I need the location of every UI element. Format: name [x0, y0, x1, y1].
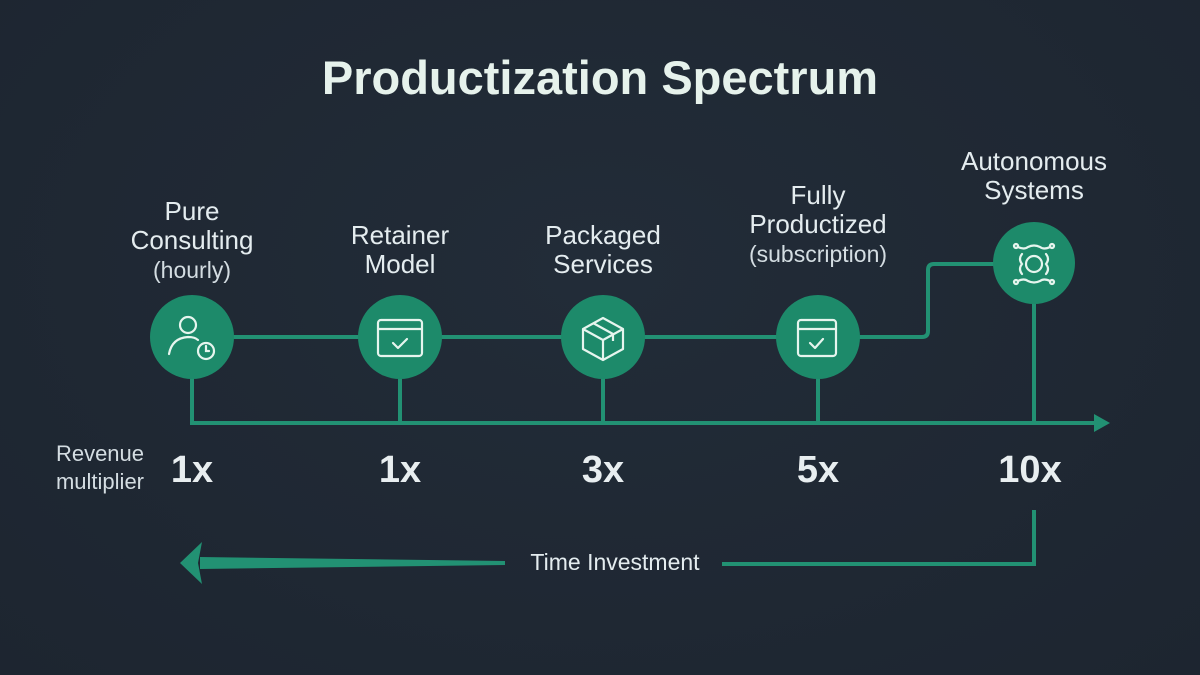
icon: browser check: [378, 320, 422, 356]
label: fully productized: [749, 180, 887, 267]
text: 1x: [171, 449, 213, 491]
label: retainer: [351, 220, 449, 279]
icon: box: [583, 318, 623, 360]
icon: person with clock: [169, 317, 214, 359]
label: autonomous: Systems: [984, 175, 1084, 205]
arrow: axis head: [1094, 414, 1110, 432]
text: 3x: [582, 449, 624, 491]
label: pure consulting: Pure: [165, 196, 219, 226]
label: time investment: Time Investment: [530, 549, 700, 575]
icon: browser check 2: [798, 320, 836, 356]
label: revenue multiplier: [56, 441, 144, 494]
label: fully productized: Fully: [791, 180, 845, 210]
text: 10x: [998, 449, 1062, 491]
label: packaged: [545, 220, 661, 279]
label: revenue multiplier: Revenue: [56, 441, 144, 466]
label: pure consulting: Consulting: [131, 225, 253, 255]
label: packaged: Packaged: [545, 220, 661, 250]
circles: [150, 222, 1075, 379]
text: 5x: [797, 449, 839, 491]
label: autonomous: Autonomous: [961, 146, 1107, 176]
label: fully productized: (subscription): [749, 241, 887, 267]
numbers: [171, 449, 1062, 491]
icon: gear circuit: [1014, 244, 1054, 284]
label: autonomous: [961, 146, 1107, 205]
label: revenue multiplier: multiplier: [56, 469, 144, 494]
label: retainer: Retainer: [351, 220, 449, 250]
arrow: time investment: [180, 542, 505, 584]
label: pure consulting: [131, 196, 253, 283]
label: fully productized: Productized: [749, 209, 887, 239]
text: 1x: [379, 449, 421, 491]
title: Productization Spectrum: [322, 51, 878, 104]
label: packaged: Services: [553, 249, 653, 279]
label: retainer: Model: [365, 249, 435, 279]
label: pure consulting: (hourly): [153, 257, 231, 283]
